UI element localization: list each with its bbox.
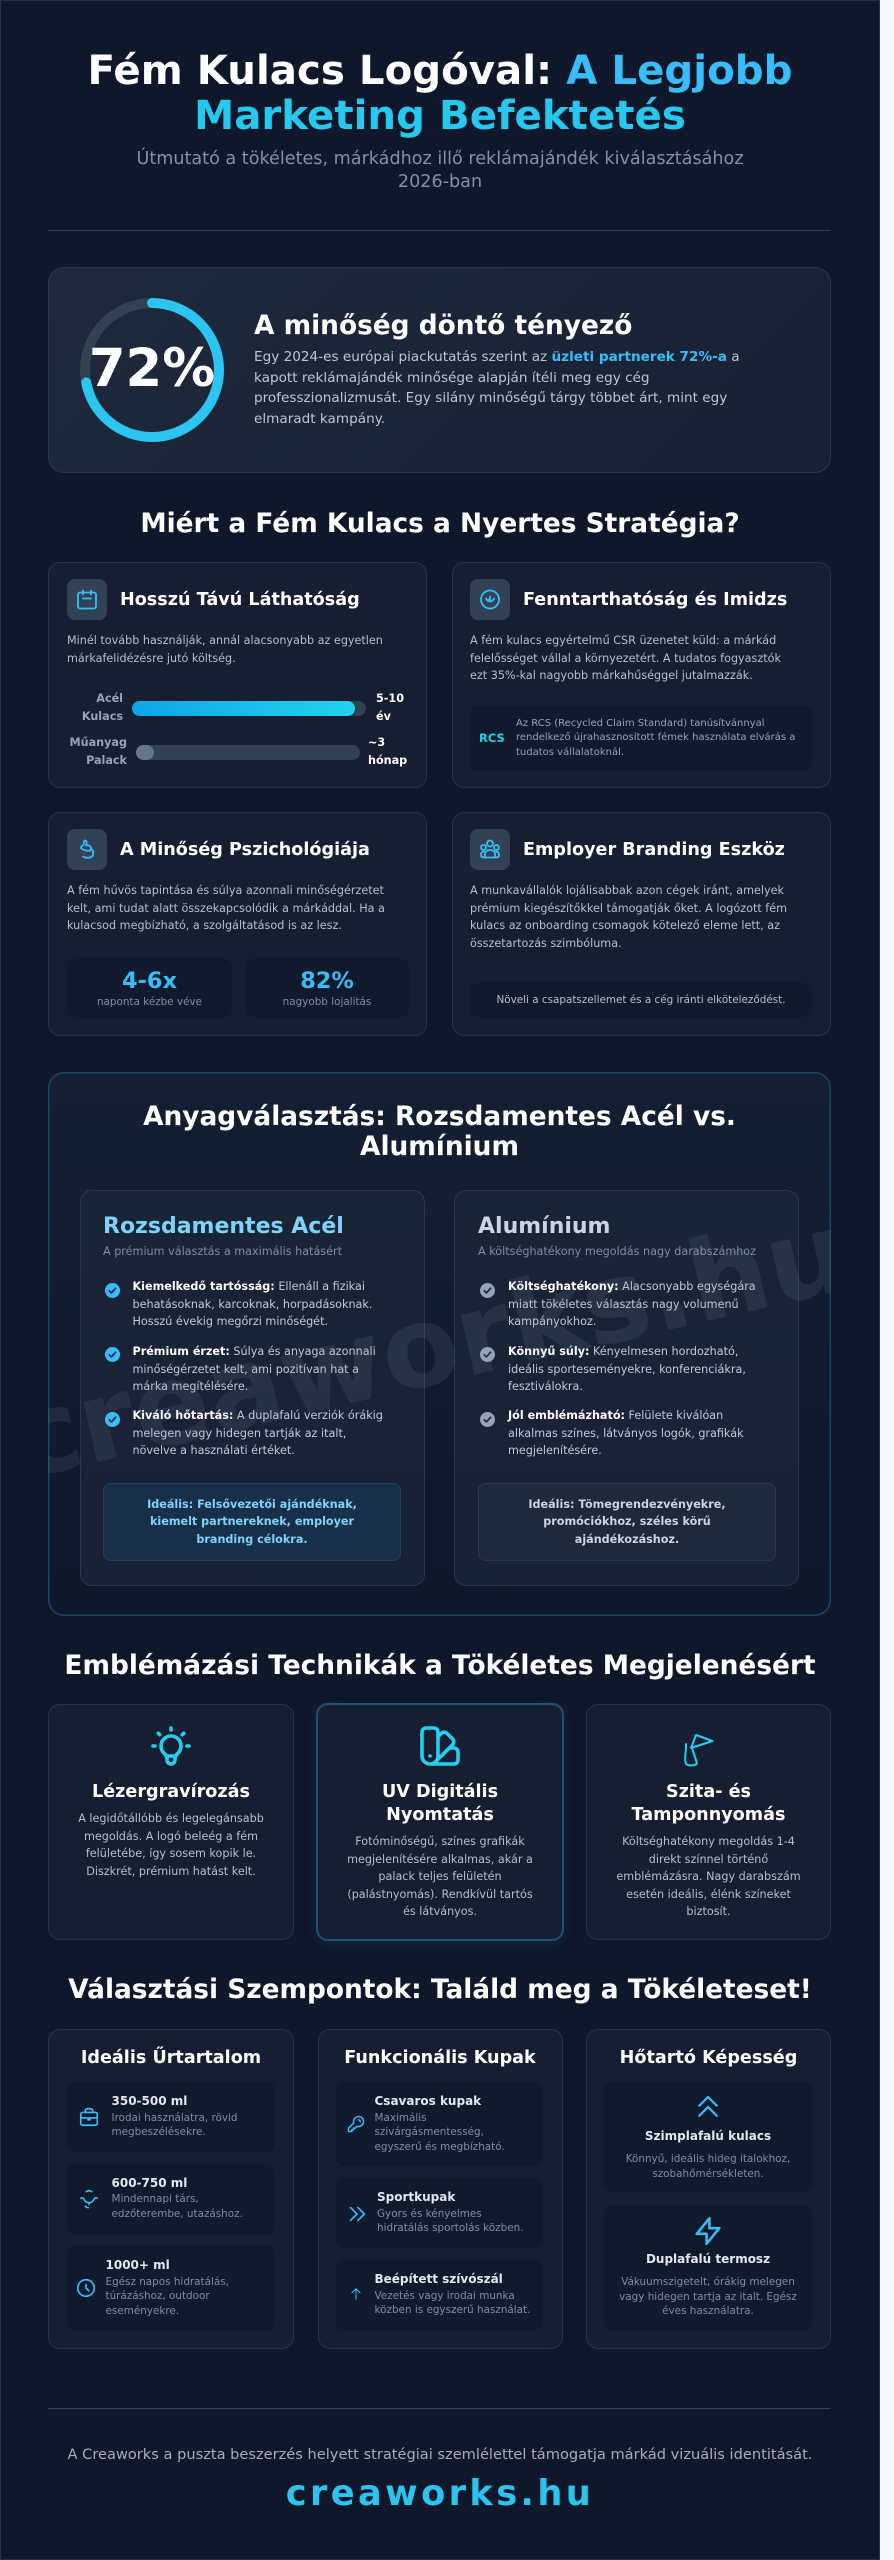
text block: kiemelt partnereknek, employer: [150, 1515, 354, 1528]
item: 600-750 ml: [67, 2164, 275, 2234]
label: Szimplafalú kulacs: [645, 2129, 771, 2143]
icon: double chevron: [346, 2202, 368, 2224]
text block: branding célokra.: [196, 1533, 308, 1546]
text block: [516, 718, 795, 758]
text block: Irodai használatra, rövid: [112, 2112, 238, 2124]
bar: steel bottle: [132, 701, 366, 716]
stat: daily handling: [67, 959, 232, 1017]
text block: Vezetés vagy irodai munka: [374, 2290, 515, 2302]
text block: tudatos vállalatoknál.: [516, 747, 624, 758]
list item: minőségérzetet kelt, ami pozitívan hat a: [132, 1363, 359, 1376]
panel: aluminium: [454, 1190, 799, 1586]
text block: kulacsod megbízható, a szolgáltatásod is az lesz.: [67, 919, 342, 932]
icon: key: [346, 2114, 366, 2134]
heading: techniques: Emblémázási Technikák a Tökéletes Megjelenésért: [64, 1650, 816, 1681]
item: 350-500 ml: [67, 2082, 275, 2152]
panel: psychology of quality: [48, 812, 427, 1036]
text block: [106, 2275, 229, 2319]
text block: [347, 1835, 533, 1918]
text block: [604, 2275, 812, 2319]
text block: Mindennapi társ,: [112, 2193, 199, 2205]
value: steel bottle: [376, 692, 404, 723]
item: 1000+ ml: [67, 2245, 275, 2330]
text block: rendelkező újrahasznosított fémek használata elvárás a: [516, 732, 795, 743]
icon: clock: [75, 2277, 97, 2299]
icon: bolt: [691, 2214, 725, 2248]
text block: palack teljes felületén: [378, 1870, 502, 1883]
callout: ideal use: [103, 1483, 401, 1561]
list item: Jól emblémázható: Felülete kiválóan: [508, 1409, 723, 1422]
value: plastic bottle: [368, 736, 407, 767]
text block: Fotóminőségű, színes grafikák: [355, 1835, 525, 1848]
text block: prémium kiegészítőkkel támogatják őket. A logózott fém: [470, 902, 787, 915]
icon: scale: [80, 2190, 98, 2208]
heading: UV Digitális: [382, 1782, 498, 1802]
text block: elmaradt kampány.: [254, 410, 385, 426]
text block: Vákuumszigetelt, órákig melegen: [621, 2276, 795, 2288]
heading: A Minőség Pszichológiája: [120, 840, 370, 860]
text block: biztosít.: [686, 1905, 731, 1918]
icon: hand: [67, 829, 107, 870]
text block: felelősséget vállal a környezetért. A tudatos fogyasztók: [470, 652, 781, 665]
value: steel bottle: év: [376, 710, 391, 723]
list item: Kiemelkedő tartósság: Ellenáll a fizikai: [132, 1280, 365, 1293]
text block: Költséghatékony megoldás 1-4: [622, 1835, 795, 1848]
list item: Prémium érzet: Súlya és anyaga azonnali: [132, 1345, 376, 1358]
text block: [377, 2207, 524, 2236]
panel: insulation: [586, 2029, 831, 2349]
subtitle: 2026-ban: [398, 172, 482, 192]
icon: squeegee: [684, 1734, 714, 1766]
list item: ideális sporteseményekre, konferenciákra,: [508, 1363, 746, 1376]
text block: összetartozás szimbóluma.: [470, 937, 622, 950]
callout: ideal use: [478, 1483, 776, 1561]
icon: arrow up: [349, 2287, 363, 2301]
title: [88, 47, 792, 139]
text block: kulacs az onboarding csomagok kötelező eleme lett, az: [470, 919, 780, 932]
heading: Alumínium: [360, 1131, 519, 1162]
label: plastic bottle: Palack: [86, 754, 127, 767]
text block: vagy hidegen tartja az italt. Egész: [619, 2291, 797, 2303]
text block: közben is egyszerű használat.: [374, 2304, 530, 2316]
list item: fesztiválokra.: [508, 1380, 583, 1393]
subtitle: [136, 148, 744, 192]
text block: [470, 634, 781, 682]
list item: Könnyű súly: Kényelmesen hordozható,: [508, 1345, 738, 1358]
icon: calendar: [67, 579, 107, 620]
value: 82%: [300, 968, 354, 994]
icon: check: [480, 1283, 495, 1298]
icon: swatch: [420, 1726, 460, 1766]
label: plastic bottle: Műanyag: [70, 736, 127, 749]
subheading: A prémium választás a maximális hatásért: [103, 1245, 342, 1258]
text block: megbeszélésekre.: [112, 2126, 206, 2138]
callout: RCS: [470, 706, 812, 770]
panel: UV digital printing: [316, 1703, 564, 1941]
text block: ajándékozáshoz.: [575, 1533, 679, 1546]
panel: hero statistic: [48, 267, 831, 473]
label: nagyobb lojalitás: [283, 996, 371, 1008]
icon: recycle circle: [470, 579, 510, 620]
label: 1000+ ml: [106, 2258, 170, 2272]
icon: people: [470, 829, 510, 870]
label: plastic bottle: [70, 736, 127, 767]
text block: A legidőtállóbb és legelegánsabb: [78, 1812, 264, 1825]
text block: márkafelidézésre jutó költség.: [67, 652, 236, 665]
text block: A fém kulacs egyértelmű CSR üzenetet küld: a márkád: [470, 634, 776, 647]
text block: kapott reklámajándék minősége alapján ítéli meg egy cég: [254, 370, 650, 386]
list item: Hosszú évekig megőrzi minőségét.: [132, 1315, 328, 1328]
label: RCS: RCS: [479, 731, 505, 745]
text block: Egy 2024-es európai piackutatás szerint az üzleti partnerek 72%-a a: [254, 349, 740, 365]
text block: A munkavállalók lojálisabbak azon cégek iránt, amelyek: [470, 884, 784, 897]
heading: criteria: Választási Szempontok: Találd meg a Tökéleteset!: [68, 1974, 812, 2005]
list item: miatt tökéletes választás nagy volumenű: [508, 1298, 739, 1311]
title: Fém Kulacs Logóval: A Legjobb: [88, 47, 792, 94]
callout: [470, 983, 812, 1017]
text block: Növeli a csapatszellemet és a cég iránti elköteleződést.: [496, 994, 786, 1006]
heading: Nyomtatás: [386, 1805, 494, 1825]
heading: Tamponnyomás: [632, 1805, 785, 1825]
footer text: A Creaworks a puszta beszerzés helyett stratégiai szemlélettel támogatja márkád vizuális identitását.: [68, 2446, 812, 2463]
panel: material comparison: [48, 1072, 831, 1616]
list item: [132, 1409, 383, 1457]
text block: megjelenítésére alkalmas, akár a: [347, 1853, 533, 1866]
panel: stainless steel: [80, 1190, 425, 1586]
heading: Szita- és: [666, 1782, 751, 1802]
heading: A minőség döntő tényező: [254, 310, 632, 341]
text block: Gyors és kényelmes: [377, 2208, 482, 2220]
heading: Fenntarthatóság és Imidzs: [523, 590, 787, 610]
list item: [132, 1345, 376, 1393]
panel: caps: [318, 2029, 562, 2349]
heading: Employer Branding Eszköz: [523, 840, 785, 860]
list item: márka megítélésére.: [132, 1380, 248, 1393]
item: double wall: [604, 2205, 812, 2330]
label: 600-750 ml: [112, 2176, 187, 2190]
text block: megoldás. A logó beleég a fém: [84, 1830, 258, 1843]
text block: [604, 2152, 812, 2181]
heading: Rozsdamentes Acél: [103, 1214, 344, 1239]
label: Beépített szívószál: [374, 2272, 503, 2286]
panel: screen and pad printing: [586, 1704, 831, 1940]
text block: [254, 349, 740, 426]
icon: double chevron up: [693, 2092, 723, 2122]
list item: behatásoknak, karcoknak, horpadásoknak.: [132, 1298, 372, 1311]
text block: túrázáshoz, outdoor: [106, 2290, 210, 2302]
list item: [132, 1280, 372, 1328]
text block: [528, 1498, 726, 1546]
text block: edzőterembe, utazáshoz.: [112, 2208, 243, 2220]
label: Duplafalú termosz: [646, 2252, 770, 2266]
list item: kampányokhoz.: [508, 1315, 596, 1328]
text block: professzionalizmusát. Egy silány minőségű tárgy többet árt, mint egy: [254, 390, 727, 406]
text block: és látványos.: [403, 1905, 477, 1918]
heading: Alumínium: [478, 1214, 610, 1239]
text block: kelt, ami tudat alatt összekapcsolódik a márkáddal. Ha a: [67, 902, 385, 915]
icon: briefcase: [80, 2108, 98, 2126]
heading: Anyagválasztás: Rozsdamentes Acél vs.: [143, 1101, 736, 1132]
icon: light bulb: [151, 1726, 191, 1766]
panel: sustainability: [452, 562, 831, 788]
stat: 72%: 72%: [89, 338, 215, 399]
label: steel bottle: Kulacs: [82, 710, 123, 723]
text block: Minél tovább használják, annál alacsonyabb az egyetlen: [67, 634, 383, 647]
list item: [507, 1409, 744, 1457]
list item: [508, 1280, 756, 1328]
text block: (palástnyomás). Rendkívül tartós: [347, 1888, 533, 1901]
text block: [374, 2289, 530, 2318]
heading: why: Miért a Fém Kulacs a Nyertes Stratégia?: [140, 508, 740, 539]
text block: ezt 35%-kal nagyobb márkahűséggel jutalmazzák.: [470, 669, 753, 682]
list item: Költséghatékony: Alacsonyabb egységára: [508, 1280, 756, 1293]
heading: Funkcionális Kupak: [344, 2048, 536, 2068]
text block: promóciókhoz, széles körű: [543, 1515, 711, 1528]
subtitle: Útmutató a tökéletes, márkádhoz illő reklámajándék kiválasztásához: [136, 149, 744, 169]
heading: Ideális Űrtartalom: [81, 2048, 261, 2068]
icon: check: [105, 1412, 120, 1427]
value: 4-6x: [122, 968, 177, 994]
label: naponta kézbe véve: [97, 996, 202, 1008]
item: single wall: [604, 2082, 812, 2192]
text block: [67, 884, 385, 932]
icon: check: [105, 1347, 120, 1362]
text block: [112, 2193, 243, 2220]
text block: emblémázásra. Nagy darabszám: [616, 1870, 801, 1883]
heading: [382, 1782, 498, 1825]
list item: Kiváló hőtartás: A duplafalú verziók órákig: [132, 1409, 383, 1422]
bar: plastic bottle: [136, 745, 360, 760]
heading: [632, 1782, 785, 1825]
text block: Egész napos hidratálás,: [106, 2276, 229, 2288]
text block: esetén ideális, élénk színeket: [626, 1888, 791, 1901]
value: plastic bottle: ~3: [368, 736, 385, 749]
text block: [616, 1835, 801, 1918]
text block: eseményekre.: [106, 2305, 179, 2317]
item: built-in straw: [336, 2260, 543, 2330]
text block: Maximális: [374, 2112, 427, 2124]
title: Marketing Befektetés: [194, 92, 686, 139]
text block: [374, 2111, 505, 2155]
panel: capacity: [48, 2029, 294, 2349]
text block: Ideális: Felsővezetői ajándéknak,: [147, 1498, 357, 1510]
panel: laser engraving: [48, 1704, 294, 1940]
text block: direkt színnel történő: [649, 1853, 768, 1866]
text block: [78, 1812, 264, 1878]
list item: alkalmas színes, látványos logók, grafikák: [508, 1427, 744, 1440]
brand: creaworks.hu: [286, 2473, 594, 2514]
panel: employer branding: [452, 812, 831, 1036]
list item: megjelenítésére.: [508, 1444, 602, 1457]
list item: melegen vagy hidegen tartják az italt,: [132, 1427, 346, 1440]
icon: check: [105, 1283, 120, 1298]
value: plastic bottle: hónap: [368, 754, 407, 767]
value: steel bottle: 5-10: [376, 692, 404, 705]
list item: [508, 1345, 746, 1393]
text block: [470, 884, 787, 950]
text block: Ideális: Tömegrendezvényekre,: [528, 1498, 726, 1510]
label: 350-500 ml: [112, 2094, 187, 2108]
heading: [143, 1101, 736, 1162]
stat: loyalty: [245, 959, 409, 1017]
text block: szobahőmérsékleten.: [652, 2168, 764, 2180]
label: steel bottle: Acél: [96, 692, 123, 705]
item: sport cap: [336, 2178, 543, 2248]
text block: Diszkrét, prémium hatást kelt.: [86, 1865, 256, 1878]
text block: éves használatra.: [662, 2305, 754, 2317]
heading: Hőtartó Képesség: [620, 2048, 797, 2068]
icon: check: [480, 1347, 495, 1362]
text block: szivárgásmentesség,: [374, 2126, 484, 2138]
label: steel bottle: [82, 692, 123, 723]
text block: Könnyű, ideális hideg italokhoz,: [626, 2153, 790, 2165]
panel: long-term visibility: [48, 562, 427, 788]
text block: felületébe, így sosem kopik le.: [86, 1847, 256, 1860]
heading: Lézergravírozás: [92, 1782, 250, 1802]
item: screw cap: [336, 2082, 543, 2166]
label: Sportkupak: [377, 2190, 455, 2204]
text block: A fém hűvös tapintása és súlya azonnali minőségérzetet: [67, 884, 384, 897]
icon: check: [480, 1412, 495, 1427]
subheading: A költséghatékony megoldás nagy darabszámhoz: [478, 1245, 756, 1258]
label: Csavaros kupak: [374, 2094, 481, 2108]
chart: 72% ring: [80, 298, 224, 442]
text block: [147, 1498, 357, 1546]
text block: [112, 2112, 238, 2138]
heading: Hosszú Távú Láthatóság: [120, 590, 360, 610]
text block: egyszerű és megbízható.: [374, 2141, 505, 2153]
text block: [67, 634, 383, 665]
list item: növelve a használati értéket.: [132, 1444, 295, 1457]
text block: Az RCS (Recycled Claim Standard) tanúsítvánnyal: [516, 718, 764, 728]
text block: hidratálás sportolás közben.: [377, 2222, 524, 2234]
